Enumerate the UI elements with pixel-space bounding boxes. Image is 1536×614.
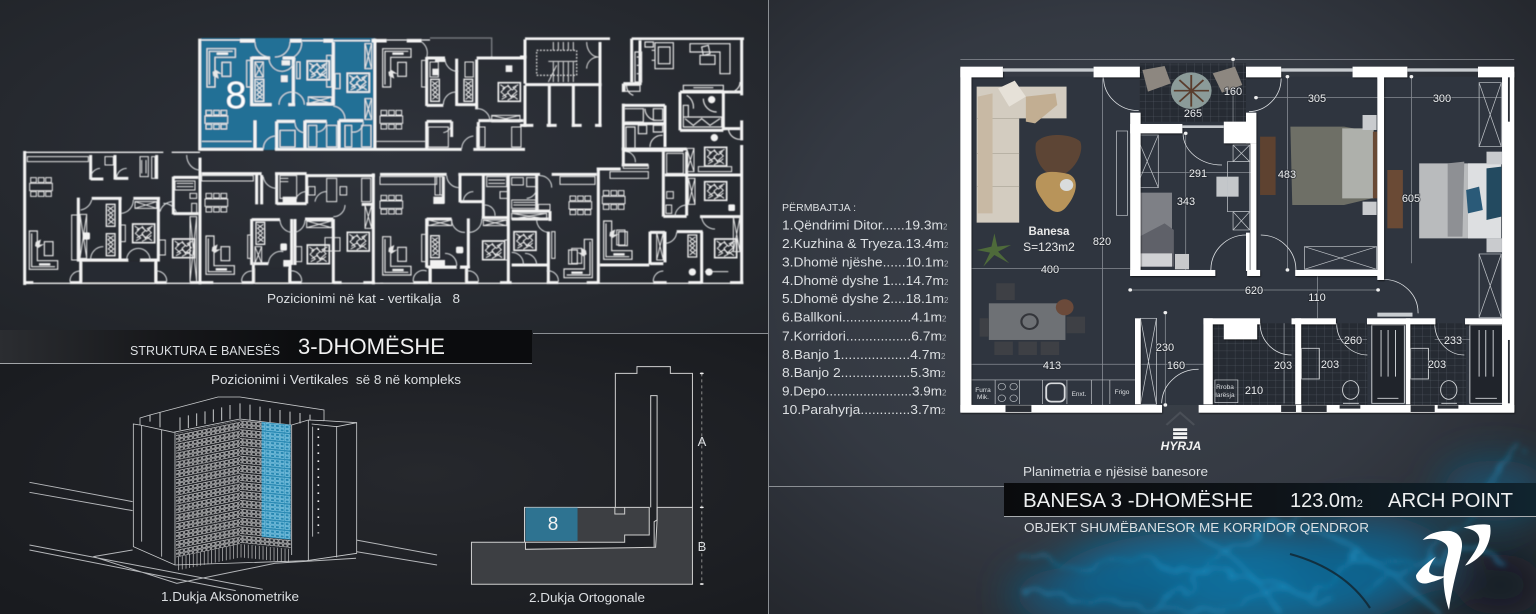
plan dimensions and labels: 400 — [1041, 264, 1059, 276]
panel: apartment floor plan — [960, 58, 1514, 453]
heading label: STRUKTURA E BANESËS — [130, 343, 280, 358]
small room labels: Frigo — [1115, 389, 1130, 396]
title: project name: ARCH POINT — [1388, 490, 1513, 512]
heading main: 3-DHOMËSHE — [298, 334, 445, 359]
small room labels: Mik. — [977, 394, 989, 401]
list rows: 2.Kuzhina & Tryeza.13.4m — [782, 236, 944, 251]
sofa — [977, 81, 1067, 223]
plan dimensions and labels: 160 — [1224, 86, 1242, 98]
plan section: lower right units — [380, 145, 743, 284]
plan dimensions and labels: 343 — [1177, 196, 1195, 208]
plan dimensions and labels: 233 — [1444, 335, 1462, 347]
furniture: lower right beds — [483, 147, 737, 260]
single room furniture — [1116, 131, 1250, 269]
caption: axonometric: 1.Dukja Aksonometrike — [161, 589, 299, 604]
subtitle: OBJEKT SHUMËBANESOR ME KORRIDOR QENDROR — [1024, 520, 1369, 535]
icon: logo — [1416, 524, 1491, 610]
windows: main facade — [176, 420, 240, 571]
heading band: structure — [0, 330, 532, 364]
number 8 on plan: 8 — [225, 75, 247, 117]
plan dimensions and labels: 413 — [1043, 360, 1061, 372]
list rows: 9.Depo.......................3.9m — [782, 384, 942, 398]
list rows: 6.Ballkoni..................4.1m — [782, 310, 942, 324]
fixtures — [202, 44, 521, 147]
dimension lines — [960, 59, 1514, 405]
unit number 8: 8 — [548, 514, 558, 535]
list rows: 7.Korridori.................6.7m — [782, 328, 942, 344]
plan dimensions and labels: 265 — [1184, 108, 1202, 120]
furniture: lower right dining — [380, 191, 625, 215]
roads — [29, 482, 437, 591]
coffee tables — [1035, 135, 1081, 212]
list rows: 2 — [942, 314, 947, 324]
window markers — [1006, 77, 1510, 412]
blue vertical strip — [262, 422, 291, 549]
dimension dots — [1128, 58, 1413, 407]
furniture: upper sofas — [207, 49, 411, 87]
windows — [1003, 68, 1478, 317]
small room labels: Enxt. — [1072, 391, 1087, 398]
plan dimensions and labels: 203 — [1274, 360, 1292, 372]
furniture: lower left beds — [133, 224, 369, 264]
furniture: lower left wardrobes — [106, 204, 265, 256]
furniture: lower left sofas — [29, 231, 234, 274]
plan dimensions and labels: 620 — [1245, 285, 1263, 297]
door swings — [1104, 77, 1464, 403]
stairs — [537, 42, 598, 82]
caption: floor positioning: Pozicionimi në kat - vertikalja 8 — [267, 291, 460, 306]
list rows: 2 — [943, 222, 948, 232]
furniture: lower left dining — [30, 178, 228, 212]
plan section: stair core and upper right unit — [520, 32, 835, 150]
plan dimensions and labels: 203 — [1321, 359, 1339, 371]
list rows: 2 — [944, 296, 949, 305]
plan dimensions and labels: 820 — [1093, 236, 1111, 248]
bathroom tile areas — [1213, 323, 1466, 405]
highlighted apartment 8 — [201, 38, 375, 150]
plan dimensions and labels: 260 — [1344, 335, 1362, 347]
plan dimensions and labels: 230 — [1156, 342, 1174, 354]
dimension dots — [700, 372, 704, 585]
balcony furniture — [1142, 66, 1242, 109]
caption: vertical positioning: Pozicionimi i Vertikales së 8 në kompleks — [211, 372, 462, 387]
panel divider lines — [533, 0, 1004, 614]
list rows: 2 — [941, 407, 946, 416]
list rows: 2 — [944, 260, 949, 268]
title band — [1004, 483, 1536, 516]
list title: PËRMBAJTJA : — [782, 202, 856, 214]
highlighted unit 8 — [525, 508, 578, 541]
plan section: upper units — [200, 38, 525, 151]
wardrobe by entrance — [1141, 318, 1238, 404]
background: right panel — [768, 0, 1536, 614]
entrance label: HYRJA — [1161, 439, 1201, 453]
windows: side facade — [240, 420, 291, 562]
interior floor — [971, 77, 1502, 405]
plan dimensions and labels: 305 — [1308, 93, 1326, 105]
axonometric building drawing — [29, 397, 437, 591]
apartment name label: Banesa — [1029, 226, 1070, 238]
dimension line — [701, 373, 703, 584]
apartment area label: S=123m2 — [1023, 240, 1075, 254]
list rows: 2 — [941, 370, 946, 379]
plan dimensions and labels: 605 — [1402, 193, 1420, 205]
plan dimensions and labels: 110 — [1308, 292, 1326, 304]
list rows: 2 — [944, 241, 949, 250]
caption: orthogonal: 2.Dukja Ortogonale — [529, 590, 645, 605]
list rows: 1.Qëndrimi Ditor......19.3m — [782, 218, 943, 232]
walls — [960, 67, 1514, 413]
list rows: 5.Dhomë dyshe 2....18.1m — [782, 291, 944, 306]
background: left lower panel — [0, 333, 768, 614]
balcony tiled area — [1140, 63, 1246, 122]
small room labels: Furra — [975, 387, 991, 394]
bathroom fixtures — [1302, 325, 1502, 403]
caption: plan: Planimetria e njësisë banesore — [1023, 464, 1208, 479]
furniture: upper beds — [307, 61, 520, 101]
background: left upper panel — [0, 0, 768, 333]
fixtures — [27, 157, 372, 282]
plan dimensions and labels: 291 — [1189, 168, 1207, 180]
contents list — [782, 202, 949, 417]
list rows: 2 — [942, 334, 947, 342]
building body — [133, 397, 357, 565]
small room labels: larësja — [1215, 392, 1235, 399]
furniture: upper wardrobes — [255, 79, 473, 101]
kitchen counter — [971, 380, 1135, 404]
plant — [977, 233, 1011, 267]
double room 2 furniture — [1387, 83, 1502, 317]
plan dimensions and labels: 160 — [1167, 360, 1185, 372]
list rows: 8.Banjo 2..................5.3m — [782, 365, 941, 380]
list rows: 2 — [942, 388, 947, 398]
dining table — [980, 283, 1085, 355]
plan dimensions and labels: 483 — [1278, 169, 1296, 181]
plan dimensions and labels: 300 — [1433, 93, 1451, 105]
list rows: 3.Dhomë njëshe......10.1m — [782, 254, 944, 270]
label B: B — [698, 539, 706, 554]
panel: floor level plan — [25, 32, 835, 285]
list rows: 8.Banjo 1..................4.7m — [782, 347, 941, 362]
list rows: 2 — [941, 352, 946, 361]
orthogonal site plan — [471, 367, 704, 585]
furniture: upper dining — [205, 110, 403, 129]
list rows — [782, 218, 949, 417]
small room labels — [975, 384, 1235, 401]
blue smoke decoration — [1010, 455, 1536, 614]
furniture: lower right wardrobes — [431, 235, 697, 258]
list rows: 10.Parahyrja.............3.7m — [782, 402, 941, 417]
plan section: lower left units — [25, 151, 383, 285]
title: apartment type: BANESA 3 -DHOMËSHE — [1023, 490, 1253, 512]
fixtures — [380, 148, 740, 272]
grey lower block — [471, 507, 692, 584]
small room labels: Rroba — [1216, 384, 1234, 391]
tower outline — [615, 367, 692, 547]
plan dimensions and labels: 203 — [1428, 359, 1446, 371]
label A: A — [698, 434, 707, 449]
list rows: 4.Dhomë dyshe 1....14.7m — [782, 273, 944, 288]
furniture: upper right unit — [625, 42, 740, 149]
entrance symbol — [1166, 413, 1194, 439]
plan dimensions and labels — [1041, 86, 1462, 397]
plan dimensions and labels: 210 — [1245, 385, 1263, 397]
double room 1 furniture — [1260, 115, 1377, 269]
furniture: lower right sofas — [383, 221, 632, 278]
title: area: 123.0m2 — [1290, 490, 1363, 512]
list rows: 2 — [944, 278, 949, 287]
